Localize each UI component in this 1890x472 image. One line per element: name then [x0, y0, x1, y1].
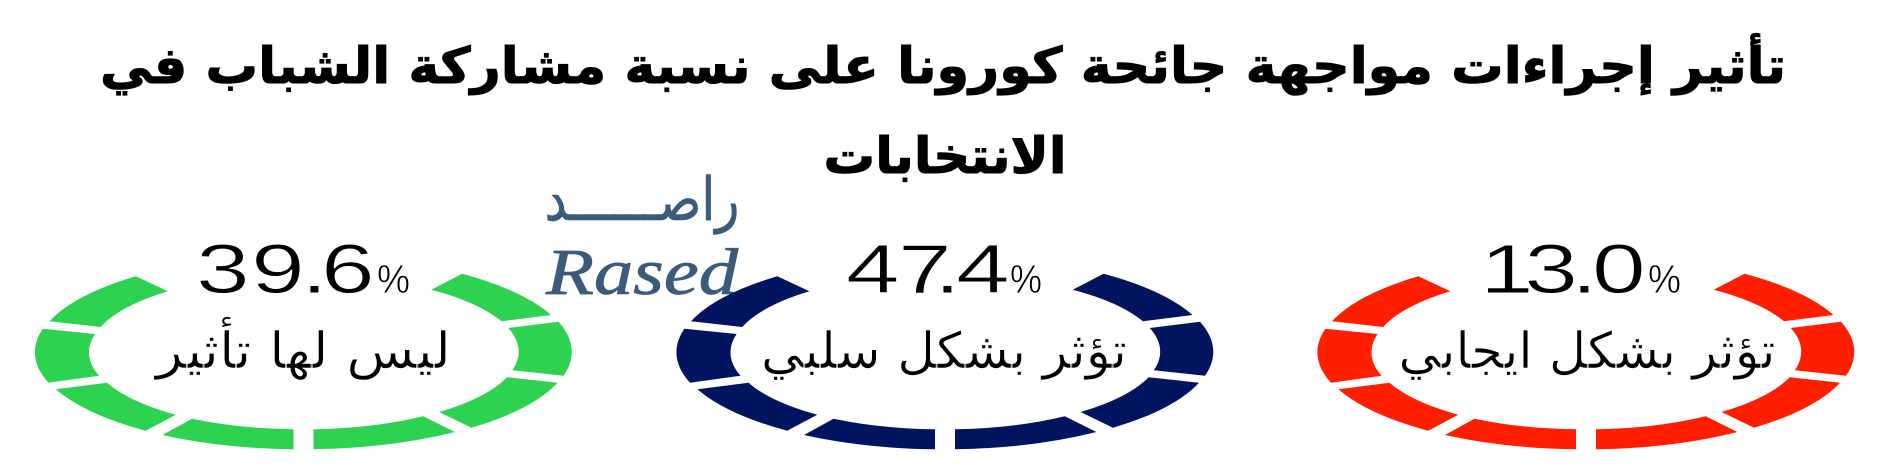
logo: Rased: راصــــــد — [544, 165, 740, 235]
value: 47.4%: 47.4 — [846, 230, 1010, 308]
title: الانتخابات — [824, 127, 1066, 185]
panel: positive effect (red) — [1317, 230, 1854, 449]
label: no effect: ليس لها تأثير — [153, 316, 451, 381]
title — [100, 33, 1786, 185]
ring: navy segmented — [676, 274, 1213, 449]
title: تأثير إجراءات مواجهة جائحة كورونا على نسبة مشاركة الشباب في — [100, 33, 1786, 96]
logo: Rased: Rased — [545, 236, 739, 309]
panel: negative effect (navy) — [676, 230, 1213, 449]
ring: red segmented — [1317, 274, 1854, 449]
logo: Rased — [544, 165, 740, 309]
value: 39.6%: % — [377, 258, 410, 302]
value: 13.0%: 13.0 — [1480, 230, 1646, 308]
value: 47.4%: % — [1010, 258, 1042, 302]
panel: no effect (green) — [35, 230, 572, 449]
label: positive effect: تؤثر بشكل ايجابي — [1398, 322, 1776, 380]
value: 39.6%: 39.6 — [196, 230, 375, 308]
value: 13.0%: % — [1648, 258, 1681, 302]
label: negative effect: تؤثر بشكل سلبي — [761, 322, 1127, 380]
ring: green segmented — [35, 274, 572, 449]
